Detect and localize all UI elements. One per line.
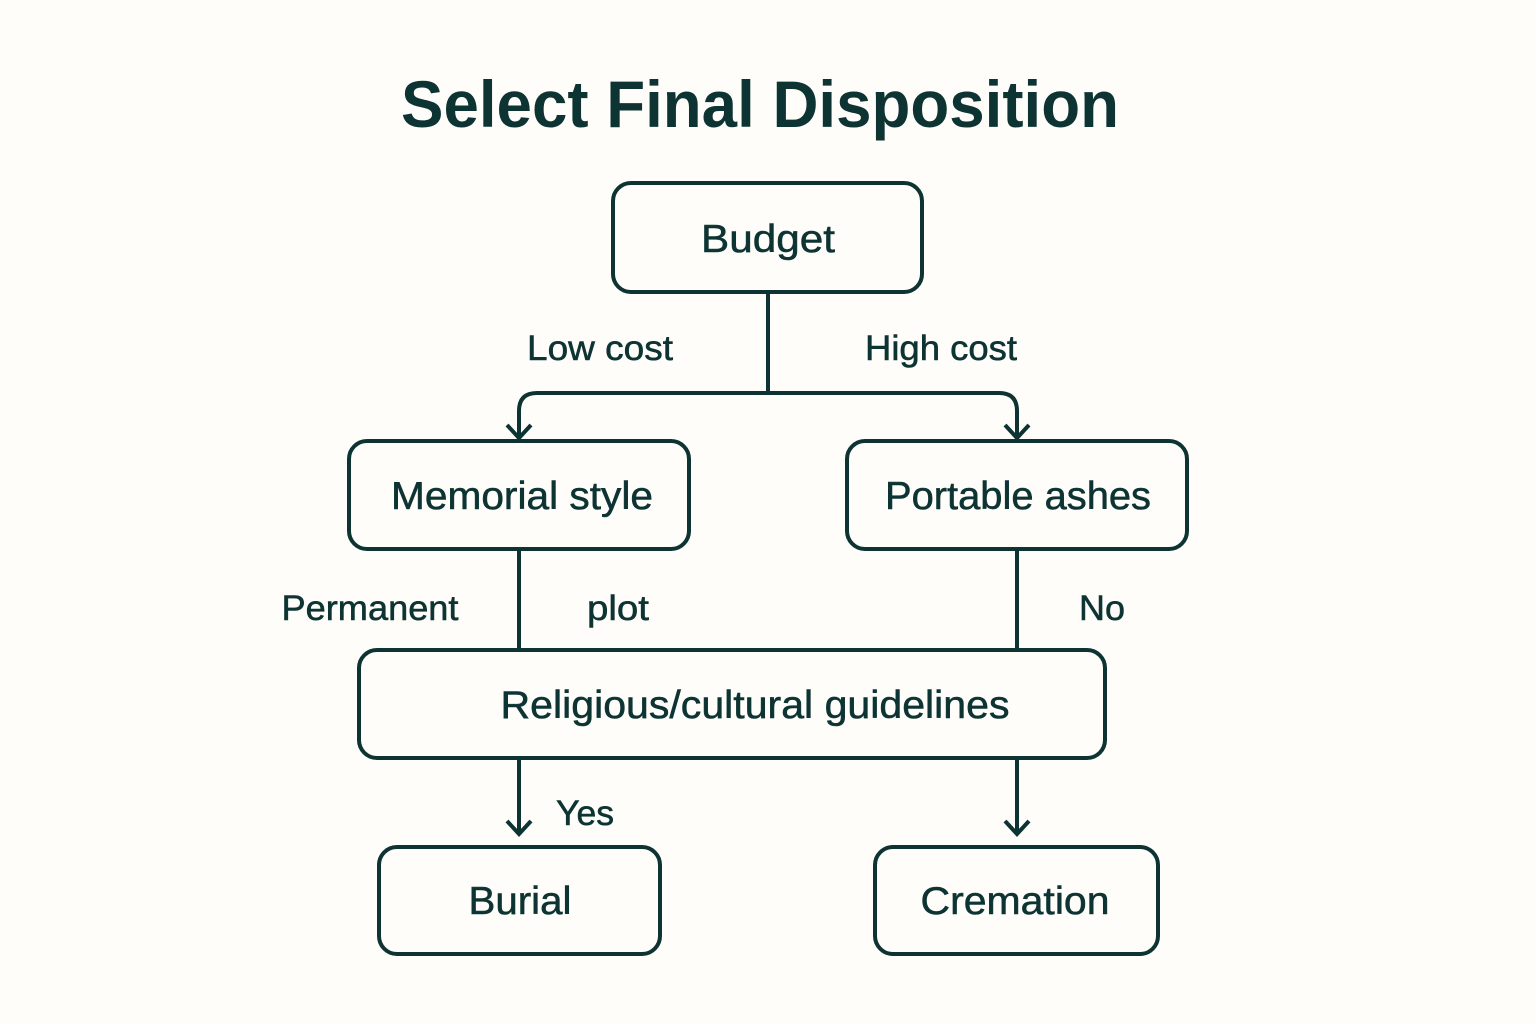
box: memorial style bbox=[349, 441, 689, 549]
box: portable ashes: Portable ashes bbox=[885, 475, 1151, 518]
box: budget: Budget bbox=[701, 218, 835, 261]
box: portable ashes bbox=[847, 441, 1187, 549]
arrow: guidelines to burial bbox=[507, 758, 531, 834]
box: cremation bbox=[875, 847, 1158, 954]
connector: memorial to guidelines bbox=[517, 549, 521, 650]
label: yes: Yes bbox=[556, 794, 614, 833]
label: plot: plot bbox=[587, 589, 649, 628]
box: memorial style: Memorial style bbox=[391, 475, 653, 518]
label: low cost: Low cost bbox=[527, 329, 673, 368]
connector: portable to guidelines bbox=[1015, 549, 1019, 650]
box: cremation: Cremation bbox=[920, 880, 1110, 923]
label: no: No bbox=[1079, 589, 1125, 628]
title: Select Final Disposition bbox=[401, 67, 1119, 141]
box: religious/cultural guidelines: Religious/cultural guidelines bbox=[500, 684, 1010, 727]
box: budget bbox=[613, 183, 922, 292]
box: burial bbox=[379, 847, 660, 954]
connector: budget to branches bbox=[507, 292, 1029, 438]
label: permanent: Permanent bbox=[282, 589, 459, 628]
arrow: guidelines to cremation bbox=[1005, 758, 1029, 834]
label: high cost: High cost bbox=[865, 329, 1017, 368]
box: religious/cultural guidelines bbox=[359, 650, 1105, 758]
box: burial: Burial bbox=[468, 880, 572, 923]
